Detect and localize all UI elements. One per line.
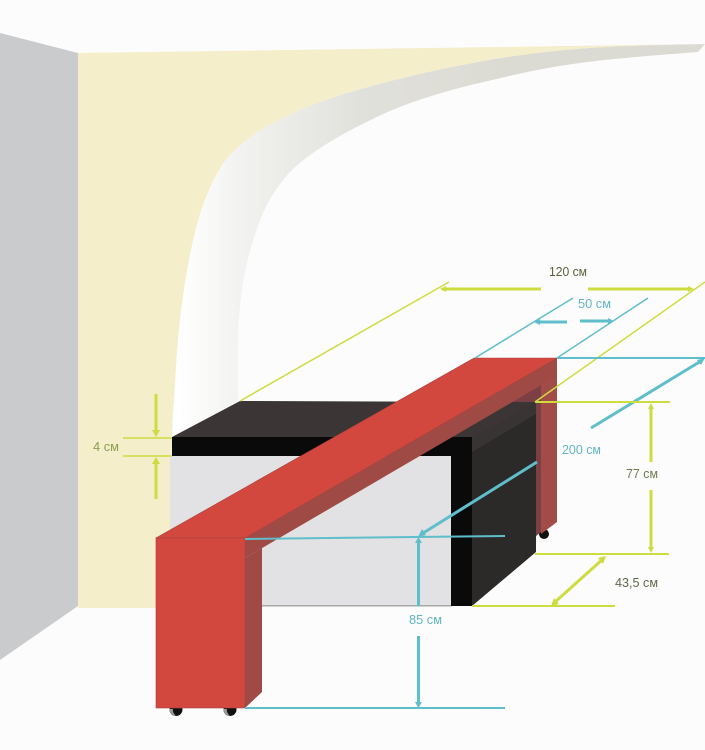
green dimension lines: 43,5 cm <box>472 556 615 606</box>
near leg front <box>156 538 245 708</box>
blue dimension lines: 85 cm <box>245 537 505 708</box>
front leg <box>451 456 472 606</box>
label: 4 cm: 4 см <box>93 439 119 454</box>
top face <box>156 358 557 538</box>
white-grey table front <box>170 456 452 606</box>
console: wheels <box>170 703 236 716</box>
blue dimension lines: 200 cm <box>245 358 705 539</box>
table side panel <box>472 402 536 606</box>
label: 200 cm: 200 см <box>562 442 601 457</box>
console: far red leg with wheel <box>450 375 557 539</box>
green dimension lines: 77 cm <box>535 402 670 554</box>
table top face <box>172 401 536 438</box>
table front edge <box>172 437 472 456</box>
label: 77 cm: 77 см <box>626 466 658 481</box>
blue dimension lines: 50 cm <box>475 298 648 358</box>
label: 120 cm: 120 см <box>549 264 587 279</box>
green dimension lines: 120 cm <box>240 282 705 402</box>
cream back wall <box>78 44 705 608</box>
desk: black table <box>170 401 536 606</box>
console: red top, band and front leg <box>156 358 557 708</box>
left grey wall <box>0 33 78 660</box>
label: 85 cm: 85 см <box>409 612 442 627</box>
label: 43,5 cm: 43,5 см <box>615 575 658 590</box>
near leg side <box>245 548 262 708</box>
underside band <box>245 358 557 558</box>
side lip <box>472 402 536 452</box>
curved ceiling swoosh <box>172 44 705 437</box>
label: 50 cm: 50 см <box>578 296 611 311</box>
green dimension lines: 4 cm <box>123 394 172 499</box>
